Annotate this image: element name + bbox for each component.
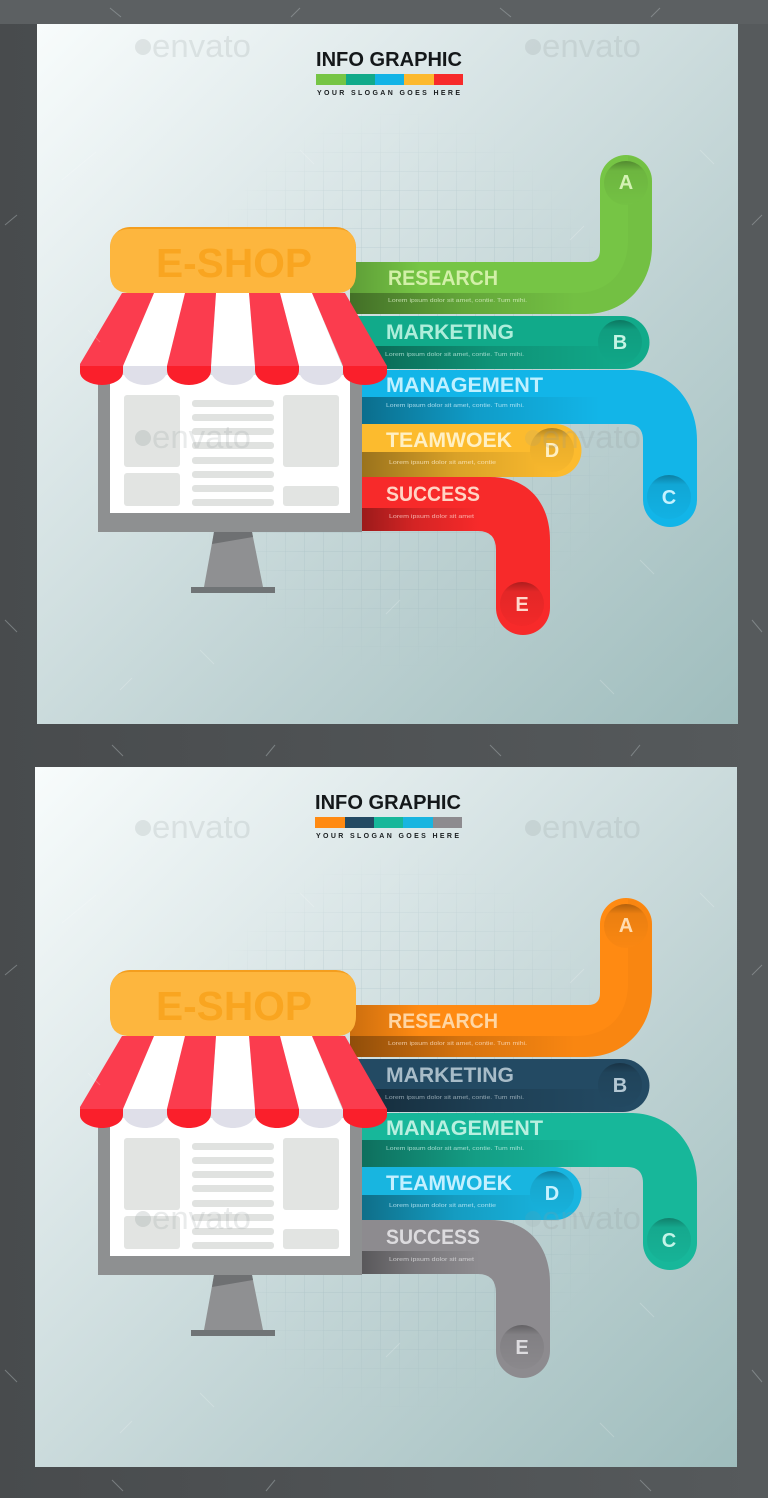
e-shop sign: E-SHOP	[156, 240, 312, 286]
watermark centre right: envato	[542, 1200, 641, 1236]
monitor stand	[191, 1275, 275, 1336]
ribbon B: marketing	[350, 316, 650, 369]
awning	[80, 1036, 387, 1128]
monitor with web page	[98, 1118, 362, 1275]
ribbon C: management: MANAGEMENT	[386, 1117, 543, 1140]
ribbon B: marketing	[350, 1059, 650, 1112]
watermark top right: envato	[542, 809, 641, 845]
ribbon D: teamwoek	[350, 1167, 582, 1220]
e-shop sign	[110, 227, 356, 293]
colour bar	[316, 74, 463, 85]
background grid	[244, 884, 590, 1368]
watermark top left: envato	[152, 28, 251, 64]
ribbon C: management: C	[662, 1230, 676, 1252]
ribbon D: teamwoek: D	[545, 1183, 559, 1205]
ribbon B: marketing: Lorem ipsum dolor sit amet, contie. Tum mihi.	[385, 1095, 525, 1101]
decorative top band	[0, 0, 768, 24]
slogan: YOUR SLOGAN GOES HERE	[317, 90, 460, 97]
watermark top right: envato	[542, 28, 641, 64]
watermark centre right: envato	[542, 419, 641, 455]
panel: green version	[37, 24, 738, 724]
ribbon D: teamwoek: Lorem ipsum dolor sit amet, contie	[389, 460, 496, 466]
ribbon E: success: E	[515, 594, 529, 616]
ribbon C: management	[350, 370, 697, 527]
ribbon B: marketing: B	[613, 1075, 627, 1097]
panel background	[35, 767, 737, 1467]
ribbon E: success: E	[515, 1337, 529, 1359]
ribbon B: marketing: Lorem ipsum dolor sit amet, contie. Tum mihi.	[385, 352, 525, 358]
ribbon D: teamwoek	[350, 424, 582, 477]
colour bar	[315, 817, 462, 828]
e-shop sign: E-SHOP	[156, 983, 312, 1029]
ribbon C: management: Lorem ipsum dolor sit amet, contie. Tum mihi.	[386, 1146, 525, 1152]
ribbon A: research: RESEARCH	[388, 1010, 498, 1033]
ribbon C: management	[350, 1113, 697, 1270]
ribbon D: teamwoek: TEAMWOEK	[386, 1172, 512, 1195]
ribbon A: research	[350, 898, 652, 1057]
background grid	[247, 140, 590, 628]
watermark centre left: envato	[152, 419, 251, 455]
ribbon E: success: Lorem ipsum dolor sit amet	[389, 514, 475, 520]
panel background	[37, 24, 738, 724]
ribbon E: success	[350, 477, 550, 635]
ribbon A: research: RESEARCH	[388, 267, 498, 290]
awning	[80, 293, 387, 385]
ribbon E: success: SUCCESS	[386, 1226, 480, 1249]
panel: orange version	[35, 767, 737, 1467]
ribbon A: research: A	[619, 915, 633, 937]
ribbon A: research: Lorem ipsum dolor sit amet, contie. Tum mihi.	[388, 298, 528, 304]
ribbon C: management: Lorem ipsum dolor sit amet, contie. Tum mihi.	[386, 403, 525, 409]
ribbon B: marketing: MARKETING	[386, 321, 514, 344]
e-shop sign	[110, 970, 356, 1036]
ribbon A: research: A	[619, 172, 633, 194]
ribbon A: research: Lorem ipsum dolor sit amet, contie. Tum mihi.	[388, 1041, 528, 1047]
ribbon A: research	[350, 155, 652, 314]
ribbon D: teamwoek: Lorem ipsum dolor sit amet, contie	[389, 1203, 496, 1209]
ribbon E: success	[350, 1220, 550, 1378]
ribbon E: success: SUCCESS	[386, 483, 480, 506]
ribbon C: management: MANAGEMENT	[386, 374, 543, 397]
ribbon D: teamwoek: TEAMWOEK	[386, 429, 512, 452]
ribbon B: marketing: MARKETING	[386, 1064, 514, 1087]
watermark top left: envato	[152, 809, 251, 845]
ribbon D: teamwoek: D	[545, 440, 559, 462]
slogan: YOUR SLOGAN GOES HERE	[316, 833, 459, 840]
watermark centre left: envato	[152, 1200, 251, 1236]
ribbon E: success: Lorem ipsum dolor sit amet	[389, 1257, 475, 1263]
title: INFO GRAPHIC	[316, 49, 462, 71]
ribbon B: marketing: B	[613, 332, 627, 354]
ribbon C: management: C	[662, 487, 676, 509]
title: INFO GRAPHIC	[315, 792, 461, 814]
monitor with web page	[98, 375, 362, 532]
monitor stand	[191, 532, 275, 593]
